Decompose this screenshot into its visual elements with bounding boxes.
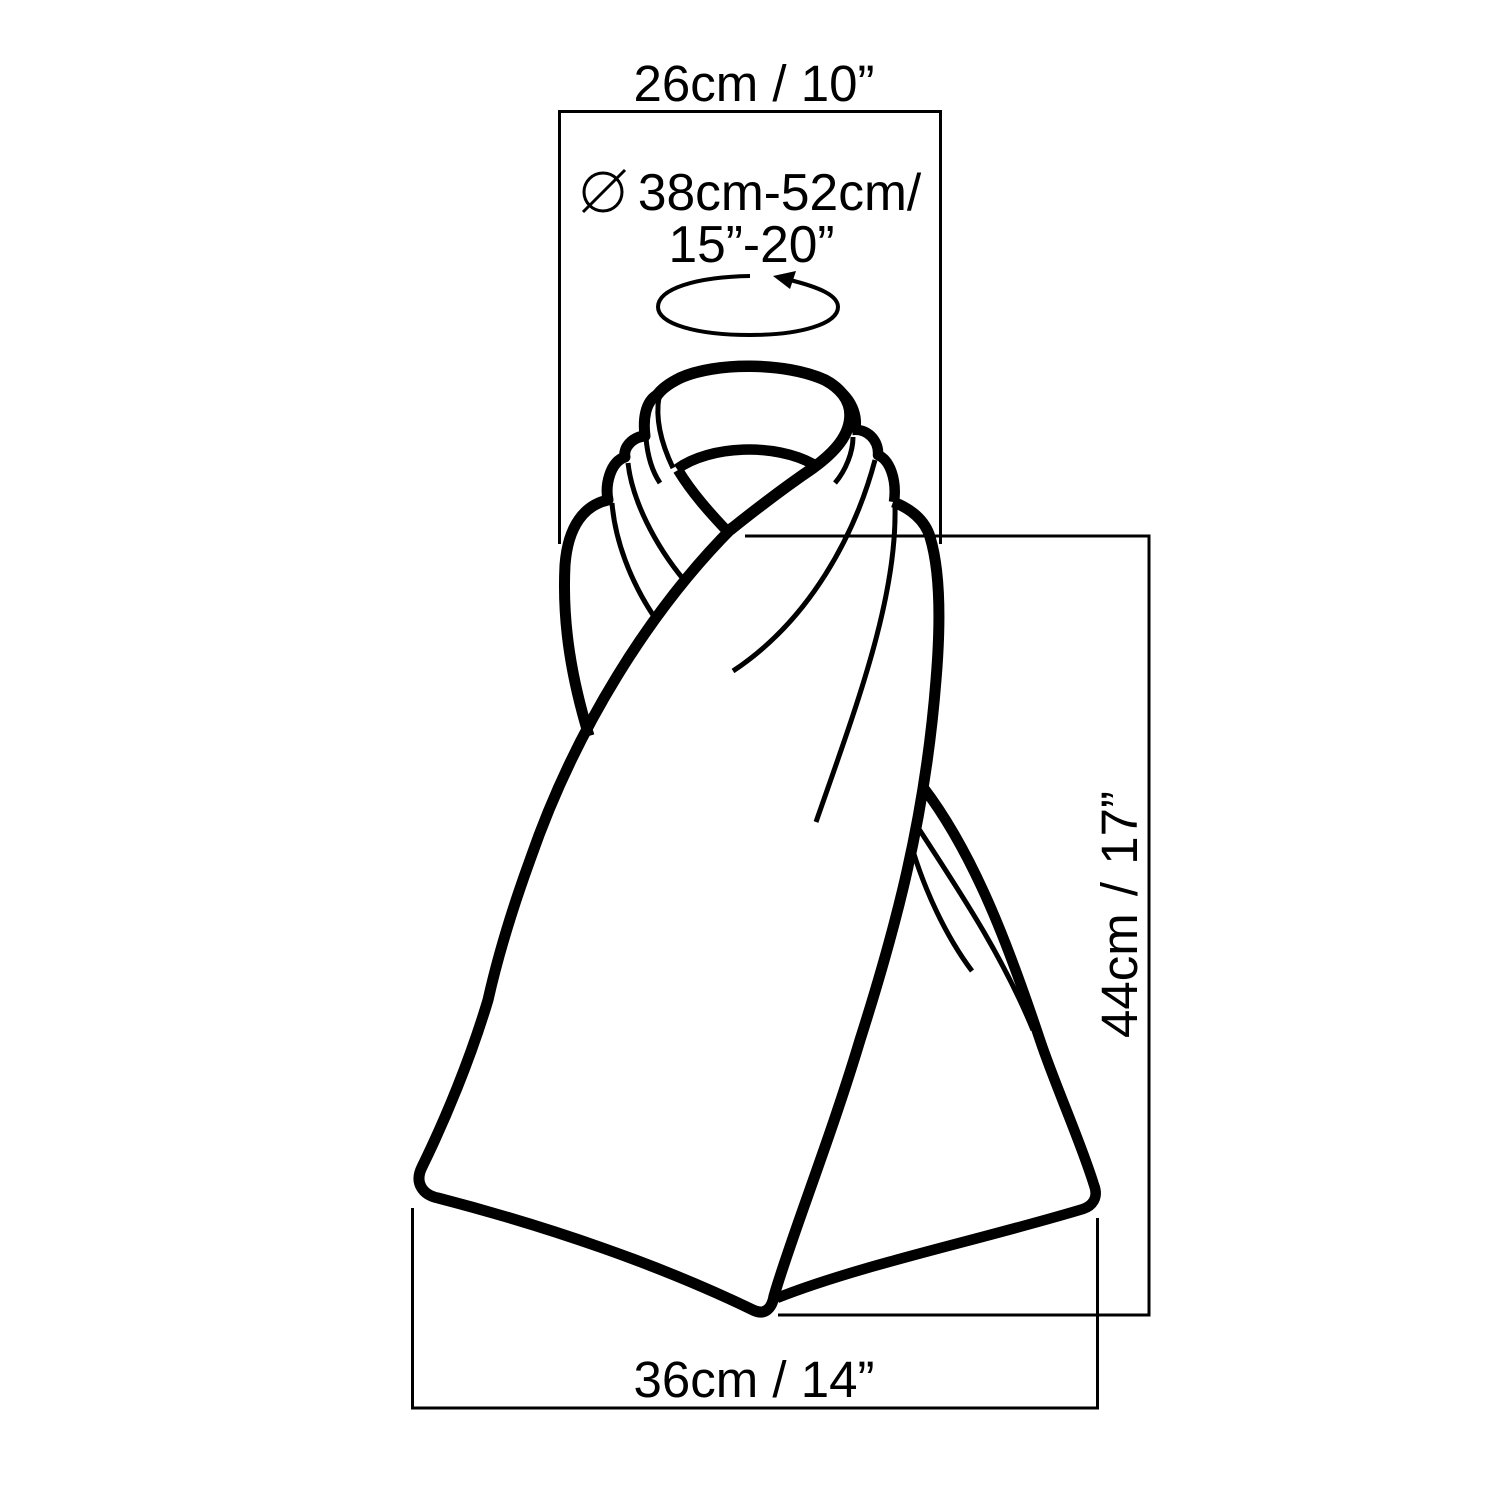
bottom width label: 36cm / 14” [634,1351,874,1408]
diameter symbol icon [583,170,625,212]
width label top: 26cm / 10” [634,55,874,112]
right collar thick edge [838,388,857,432]
right collar bumps [852,430,895,502]
inner collar diagonal [678,470,728,532]
length label: 44cm / 17” [1091,791,1148,1038]
front panel [419,502,939,1312]
bottom width bracket [412,1208,1098,1408]
fold lines [658,397,673,468]
circumference label second line: 15”-20” [668,215,835,273]
neck width bracket [560,112,940,544]
scarf drawing [419,366,1096,1312]
collar crossing and top [656,366,850,530]
left collar folds [564,395,657,736]
length bracket [745,536,1149,1315]
inner neck arc [677,450,813,469]
rotation arrow icon [658,271,838,335]
back tail [777,787,1096,1298]
circumference label: 38cm-52cm/ [638,163,922,221]
